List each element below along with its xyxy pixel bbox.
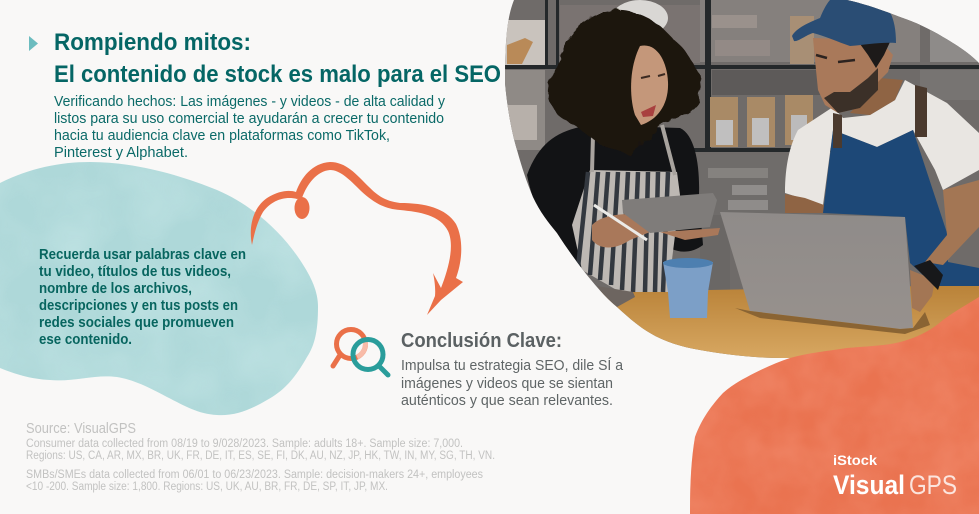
logo: iStock Visual GPS: GPS xyxy=(909,470,957,500)
icon: two magnifying glasses xyxy=(333,330,388,375)
text block: key conclusion: Impulsa tu estrategia SEO, dile SÍ a xyxy=(401,357,624,374)
woman: hands xyxy=(592,214,720,248)
logo: iStock Visual GPS xyxy=(833,452,957,500)
man: apron straps xyxy=(833,85,927,148)
text block: fact check: hacia tu audiencia clave en plataformas como TikTok, xyxy=(54,128,390,144)
man: hand xyxy=(910,270,935,312)
laptop xyxy=(720,212,913,329)
woman: hair xyxy=(550,11,701,155)
text block: source notes: Source: VisualGPS xyxy=(26,421,136,437)
tablet xyxy=(622,193,717,233)
man: neck xyxy=(850,78,903,115)
man: head xyxy=(813,38,893,113)
man: t-shirt xyxy=(785,80,979,205)
text block: keyword reminder: descripciones y en tus posts en xyxy=(39,298,238,314)
text block: source notes: SMBs/SMEs data collected from 06/01 to 06/23/2023. Sample: decision-makers 24+, employees xyxy=(26,469,483,481)
man: left arm xyxy=(785,194,824,213)
table xyxy=(600,285,979,360)
photo: two cafe owners with tablet and laptop xyxy=(500,0,979,360)
man: watch xyxy=(914,260,943,290)
stylus xyxy=(594,205,647,240)
coffee mug xyxy=(663,258,713,318)
title xyxy=(54,29,501,88)
man: beard xyxy=(824,68,878,113)
text block: source notes xyxy=(26,421,495,493)
text block: keyword reminder xyxy=(39,247,246,348)
text block: keyword reminder: Recuerda usar palabras clave en xyxy=(39,247,246,263)
logo: iStock Visual GPS: iStock xyxy=(833,452,877,468)
arrow: orange hand-drawn xyxy=(251,162,463,315)
text block: keyword reminder: tu video, títulos de tus videos, xyxy=(39,264,231,280)
title: El contenido de stock es malo para el SEO xyxy=(54,61,501,88)
man: brows xyxy=(816,55,855,62)
text block: fact check: Verificando hechos: Las imágenes - y videos - de alta calidad y xyxy=(54,94,446,110)
woman: striped apron xyxy=(572,125,680,292)
laptop shadow xyxy=(735,308,930,334)
toy on shelf xyxy=(507,38,533,64)
text block: keyword reminder: nombre de los archivos, xyxy=(39,281,192,297)
woman: eyes xyxy=(641,74,665,78)
text block: source notes: Consumer data collected from 08/19 to 9/028/2023. Sample: adults 18+. Sample size: 7,000. xyxy=(26,438,463,450)
text block: source notes: Regions: US, CA, AR, MX, BR, UK, FR, DE, IT, ES, SE, FI, DK, AU, NZ, JP, HK, TW, IN, MY, SG, TH, VN. xyxy=(26,450,495,462)
man: blue apron xyxy=(823,130,979,286)
paper bags xyxy=(710,16,814,147)
text block: keyword reminder: redes sociales que promueven xyxy=(39,315,234,331)
clock on wall xyxy=(616,0,668,28)
man: right arm xyxy=(925,180,979,265)
title: Rompiendo mitos: xyxy=(54,29,251,56)
woman: black top xyxy=(527,125,703,268)
text block: key conclusion: imágenes y videos que se sientan xyxy=(401,376,613,392)
blob: orange corner xyxy=(690,297,979,514)
woman: lips xyxy=(641,105,656,117)
brick wall xyxy=(500,0,979,360)
icon: heading triangle xyxy=(29,36,38,51)
man: cap xyxy=(792,0,896,46)
text block: fact check: listos para su uso comercial te ayudarán a crecer tu contenido xyxy=(54,111,444,127)
blob: teal watercolor xyxy=(0,162,318,415)
text block: fact check xyxy=(54,94,446,161)
text block: key conclusion: auténticos y que sean relevantes. xyxy=(401,393,613,409)
shelves xyxy=(505,0,979,152)
logo: iStock Visual GPS: Visual xyxy=(833,470,905,500)
heading: key conclusion: Conclusión Clave: xyxy=(401,330,562,352)
man: hair xyxy=(860,42,890,68)
book xyxy=(597,286,635,307)
text block: fact check: Pinterest y Alphabet. xyxy=(54,145,188,161)
woman: face xyxy=(631,45,668,125)
text block: source notes: <10 -200. Sample size: 1,800. Regions: US, UK, AU, BR, FR, DE, SP, IT, JP, MX. xyxy=(26,481,388,493)
text block: keyword reminder: ese contenido. xyxy=(39,332,132,348)
text block: key conclusion xyxy=(401,357,624,409)
